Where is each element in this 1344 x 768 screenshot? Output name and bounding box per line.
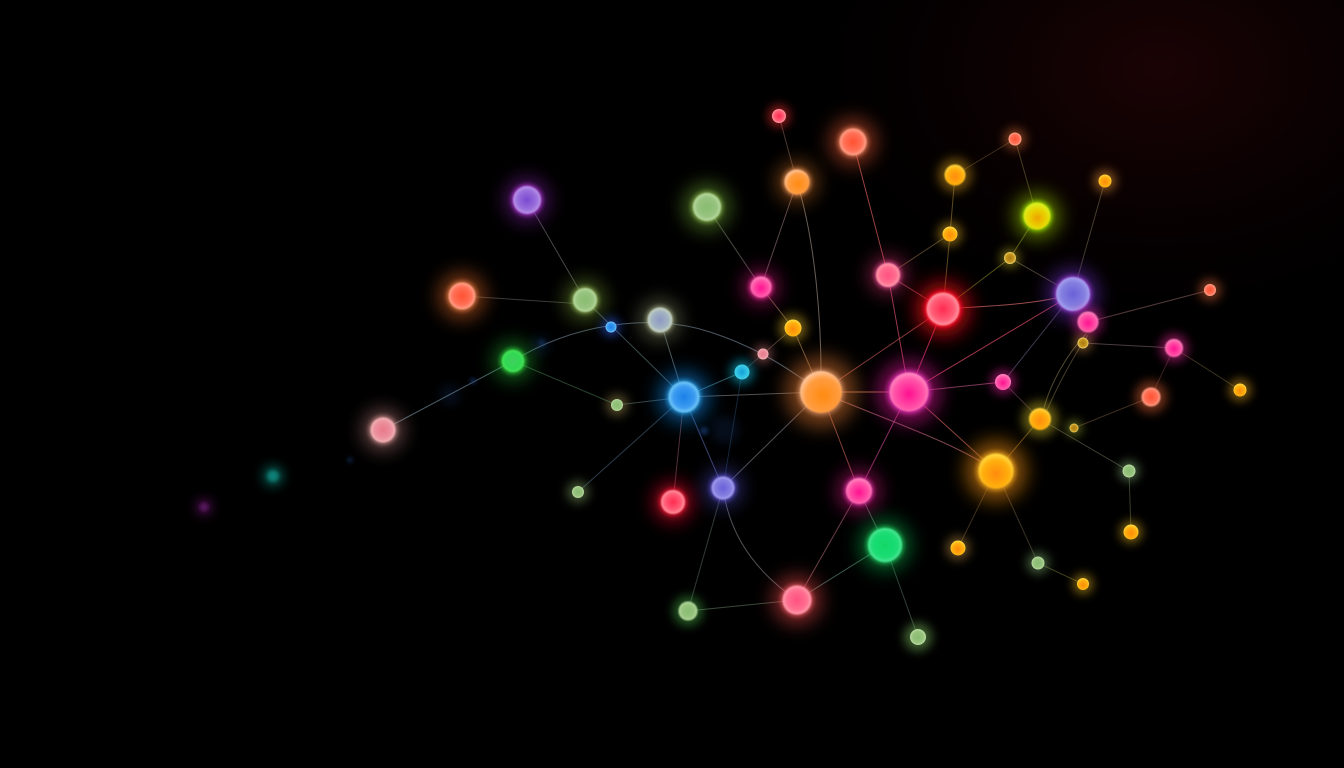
- node: pink far right: [1160, 334, 1188, 362]
- node: violet: [704, 469, 742, 507]
- node: sage top: [683, 183, 731, 231]
- node: tiny yellow mid: [1066, 420, 1082, 436]
- node: tiny amber far right: [1229, 379, 1251, 401]
- connecting lines: [383, 116, 1240, 637]
- node: pale sage right: [1119, 461, 1139, 481]
- node: tiny amber: [1094, 170, 1116, 192]
- node: tiny yellow: [1000, 248, 1020, 268]
- node: purple: [504, 177, 550, 223]
- node: pink hub: [877, 360, 941, 424]
- node: orange hub: [785, 356, 857, 428]
- node: tiny rose: [754, 345, 772, 363]
- node: coral right: [1135, 381, 1167, 413]
- node: blue: [658, 371, 710, 423]
- node: amber top: [938, 158, 972, 192]
- node: orange top: [776, 161, 818, 203]
- node: amber mid: [1022, 401, 1058, 437]
- node: pink: [868, 255, 908, 295]
- node: red top: [768, 105, 790, 127]
- node: sage bottom right: [904, 623, 932, 651]
- red haze top right: [760, 0, 1344, 350]
- node: tiny blue: [602, 318, 620, 336]
- node: green large: [859, 519, 911, 571]
- node: rose bottom: [772, 575, 822, 625]
- node: pink mid: [991, 370, 1015, 394]
- node: amber small: [779, 314, 807, 342]
- node: pink right: [1073, 307, 1103, 337]
- node: rose left: [362, 409, 404, 451]
- node: red hub: [915, 281, 971, 337]
- node: lime: [1014, 193, 1060, 239]
- faint blue haze along left curve: [440, 335, 739, 444]
- node: tiny coral right: [1199, 279, 1221, 301]
- node: pink small: [743, 269, 779, 305]
- node: sage bottom: [673, 596, 703, 626]
- node: orange left: [438, 272, 486, 320]
- node: small sage right: [1027, 552, 1049, 574]
- node: cyan: [730, 360, 754, 384]
- node: red low: [653, 482, 693, 522]
- node: amber hub: [965, 440, 1027, 502]
- node: tiny coral: [1004, 128, 1026, 150]
- node: sage: [564, 279, 606, 321]
- node: gray: [639, 299, 681, 341]
- node: far left magenta: [194, 497, 214, 517]
- node: pink low: [837, 469, 881, 513]
- node: violet large: [1047, 268, 1099, 320]
- node: amber small 2: [938, 222, 962, 246]
- node: far left teal: [261, 464, 285, 488]
- node: faint blue specks: [348, 340, 708, 462]
- node: green small: [493, 341, 533, 381]
- node: coral top: [829, 118, 877, 166]
- node: yellow low right: [1120, 521, 1142, 543]
- node: small sage: [606, 394, 628, 416]
- node: tiny amber low: [1073, 574, 1093, 594]
- node: tan low: [946, 536, 970, 560]
- node: small sage low: [567, 481, 589, 503]
- node: tiny tan: [1074, 334, 1092, 352]
